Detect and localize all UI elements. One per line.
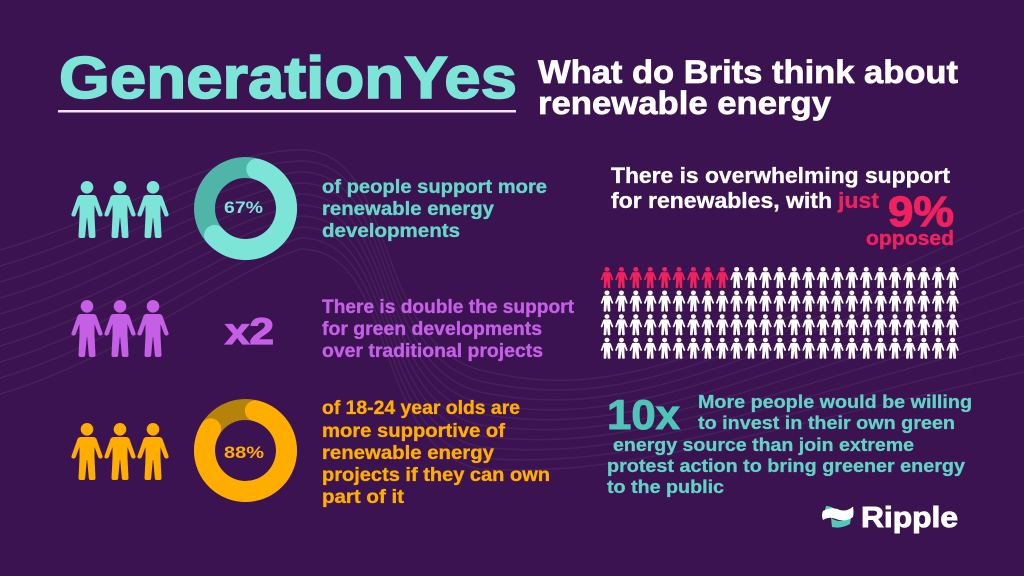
text: 88% description: more supportive of (322, 421, 506, 442)
text: 67% description: developments (322, 221, 460, 242)
text: 88% description (322, 398, 550, 508)
text: double description: There is double the support (322, 297, 575, 318)
text: just 9% opposed: 9% (888, 188, 954, 236)
panel: 67% support (71, 168, 547, 250)
subtitle (538, 54, 958, 121)
icon: three purple people (71, 300, 169, 357)
panel: 88% of 18-24s (71, 398, 550, 508)
donut chart: 88% (204, 410, 286, 492)
text: 67% description (322, 177, 547, 242)
text: 88% description: part of it (322, 487, 405, 508)
donut chart: 67%: 67% (224, 198, 263, 217)
text: 88% description: projects if they can own (322, 465, 550, 486)
icon: three orange people (71, 423, 169, 480)
text: 88% description: renewable energy (322, 443, 494, 464)
text: double description (322, 297, 575, 362)
text: overwhelming support: for renewables, with (611, 188, 832, 213)
text: 10x description: More people would be willing (698, 392, 972, 412)
pictogram: 100 people, 9 highlighted (601, 267, 959, 359)
text: overwhelming support (611, 163, 951, 213)
text: 67% description: of people support more (322, 177, 547, 198)
panel: 9% opposed (601, 163, 959, 359)
panel: double the support (71, 297, 575, 362)
text: double description: over traditional projects (322, 341, 543, 362)
text: 10x description: energy source than join extreme (613, 435, 914, 455)
subtitle: renewable energy (538, 85, 831, 121)
title: GenerationYes (59, 45, 517, 111)
panel: 10x invest (607, 391, 972, 497)
text: just 9% opposed: opposed (866, 228, 954, 250)
icon: three teal people (71, 181, 169, 238)
icon: ribbon wave (822, 506, 854, 528)
text: double description: for green developments (322, 319, 542, 340)
text: 67% description: renewable energy (322, 199, 494, 220)
text: 10x description: to the public (607, 477, 724, 497)
text: 10x description (607, 392, 972, 497)
subtitle: What do Brits think about (538, 54, 958, 90)
logo: Ripple: Ripple (861, 502, 958, 534)
logo: Ripple (822, 502, 958, 534)
text: 88% description: of 18-24 year olds are (322, 398, 520, 419)
text: overwhelming support: There is overwhelming support (611, 163, 951, 188)
donut chart: 67% (204, 168, 287, 250)
text: 10x description: to invest in their own green (698, 413, 955, 433)
text: just 9% opposed (837, 188, 954, 250)
donut chart: 88%: 88% (224, 443, 264, 462)
text: 10x description: protest action to bring greener energy (607, 456, 965, 476)
x2 figure: x2 (225, 311, 274, 352)
text: just 9% opposed: just (837, 188, 880, 213)
10x figure: 10x (607, 391, 681, 438)
title underline (58, 110, 516, 112)
